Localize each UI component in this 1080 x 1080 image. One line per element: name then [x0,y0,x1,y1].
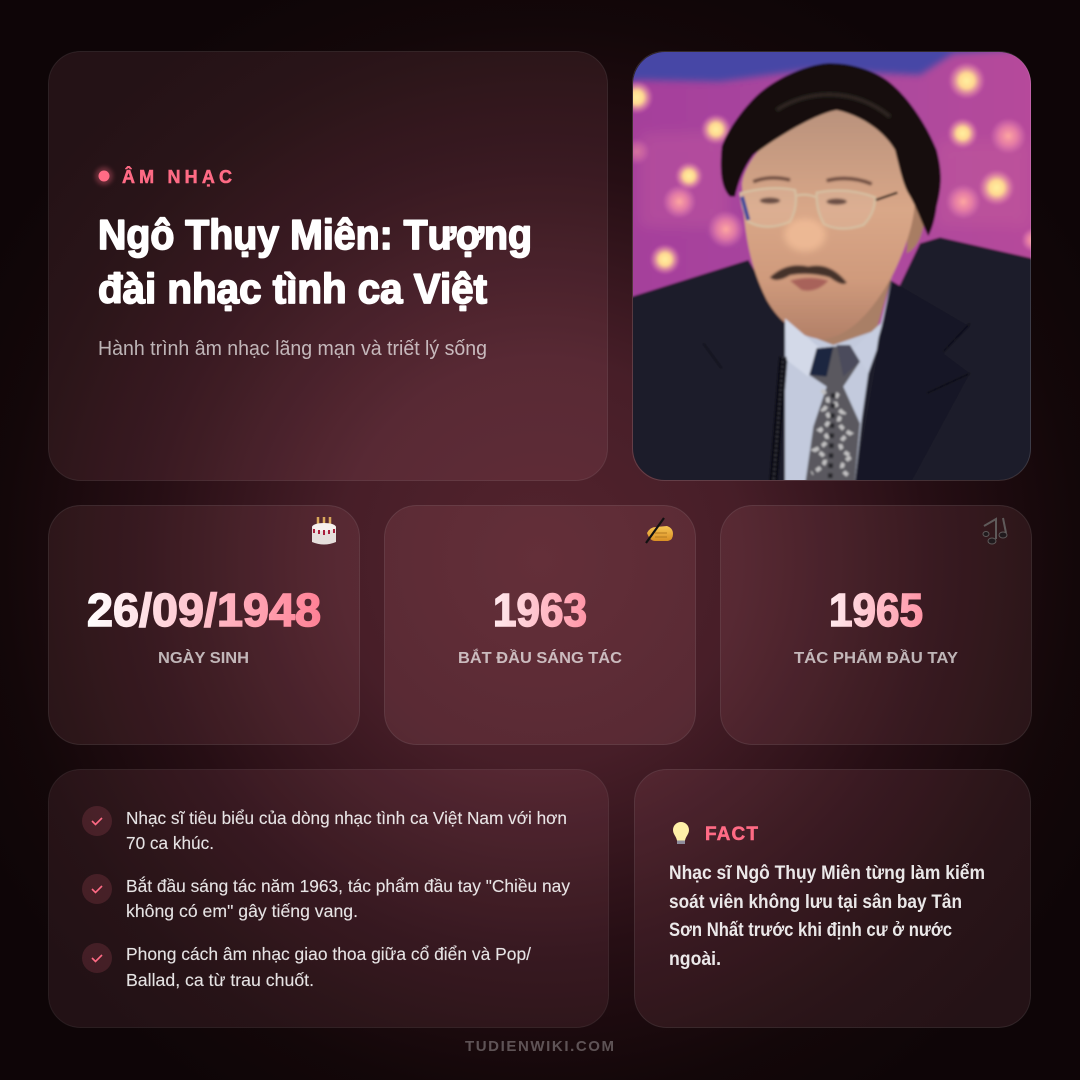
panel: stat start composing [384,506,696,744]
eyebrows and eyes [753,178,872,205]
stage lights [620,62,1045,275]
icon: light bulb [673,822,689,844]
bullet 2: Bắt đầu sáng tác năm 1963, tác phẩm đầu tay "Chiều nay [126,875,570,896]
icon: writing hand [646,518,673,543]
bullet 1: 70 ca khúc. [126,833,214,853]
mustache [770,265,847,284]
bullet 3: Phong cách âm nhạc giao thoa giữa cổ điển và Pop/ [126,944,531,964]
panel: title card [48,52,608,480]
lapel lines [703,323,970,393]
tie [803,345,860,497]
neck [817,278,892,346]
hair [721,63,941,236]
value: 1965 [829,584,923,636]
label: BẮT ĐẦU SÁNG TÁC [458,648,622,667]
bullet 3 [82,943,531,990]
title: đài nhạc tình ca Việt [98,265,487,312]
shirt [785,275,893,497]
value: 26/09/1948 [87,584,321,636]
ear [907,203,925,253]
photo border [632,52,1030,480]
value: 1963 [493,584,587,636]
suit [633,236,1031,480]
label: NGÀY SINH [158,648,249,667]
subtitle: Hành trình âm nhạc lãng mạn và triết lý sống [98,338,487,360]
microphone [773,357,783,483]
fact text: ngoài. [669,949,721,970]
photo backdrop [633,52,1031,326]
bullet 2 [82,874,570,921]
icon: music notes [983,518,1007,544]
panel: stat birth date [48,506,360,744]
category label: ÂM NHẠC [122,166,232,187]
nose and mouth shadow [784,218,826,252]
bullet 2: không có em" gây tiếng vang. [126,901,358,921]
panel: fact [634,770,1030,1028]
bullet 1 [82,806,567,853]
collar [785,318,820,377]
panel: key points [48,770,608,1028]
footer watermark: TUDIENWIKI.COM [465,1038,614,1055]
head [742,105,915,339]
panel: stat first work [720,506,1032,744]
fact text: Nhạc sĩ Ngô Thụy Miên từng làm kiểm [669,863,985,884]
title: Ngô Thụy Miên: Tượng [98,211,532,258]
portrait photo [633,52,1031,480]
icon: birthday cake [312,517,336,544]
bullet 1: Nhạc sĩ tiêu biểu của dòng nhạc tình ca Việt Nam với hơn [126,808,567,828]
fact text [669,863,985,970]
glasses [741,188,897,229]
title [98,211,532,312]
fact text: soát viên không lưu tại sân bay Tân [669,892,962,913]
label: TÁC PHẨM ĐẦU TAY [794,648,958,667]
bullet 3: Ballad, ca từ trau chuốt. [126,970,314,990]
fact text: Sơn Nhất trước khi định cư ở nước [669,920,952,941]
fact heading: FACT [705,824,758,845]
